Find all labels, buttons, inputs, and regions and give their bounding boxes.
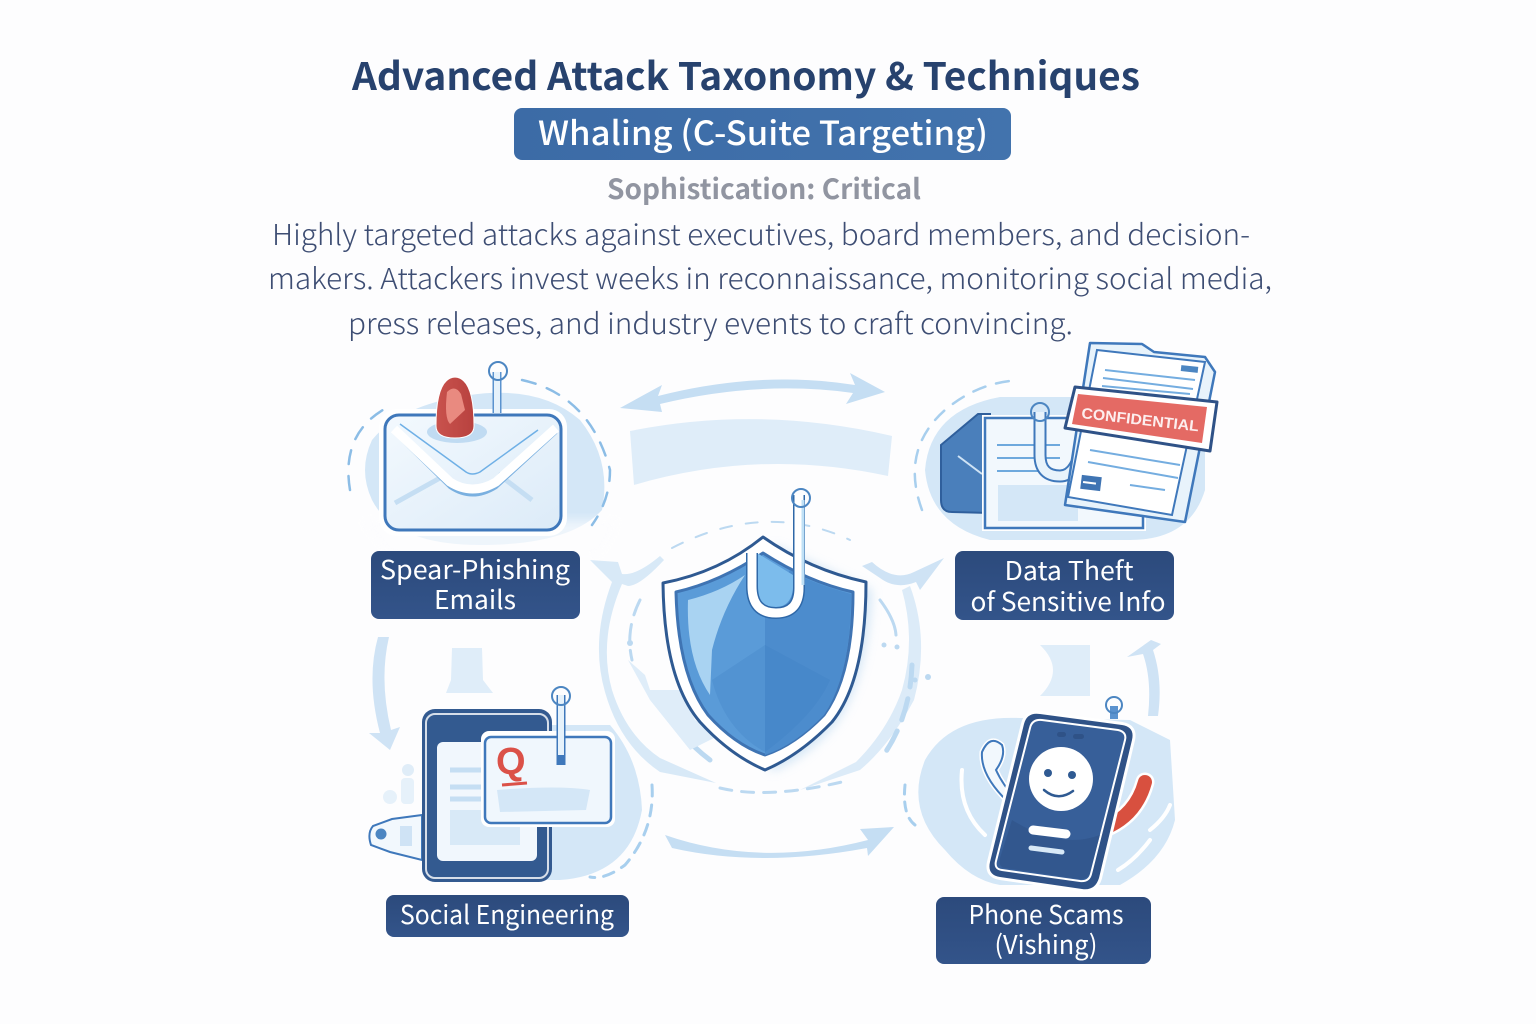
- label: social engineering: Social Engineering: [400, 895, 614, 932]
- dashed ring: [904, 785, 915, 825]
- confidential band: [1065, 387, 1217, 451]
- shield outer: [663, 537, 866, 770]
- label: data theft: of Sensitive Info: [970, 582, 1166, 619]
- sophistication level: Sophistication: Critical: [607, 168, 921, 208]
- top curved band: [630, 419, 892, 485]
- shield inner: [676, 553, 853, 755]
- icon background blob: [925, 397, 1205, 540]
- label: spear-phishing emails: Spear-Phishing: [380, 550, 570, 587]
- label: phone scams: (Vishing): [994, 925, 1098, 962]
- bottom arrow: [665, 827, 894, 858]
- icon: hook: [1110, 706, 1118, 719]
- panel: spear-phishing emails: [348, 362, 620, 555]
- hook: [752, 495, 799, 613]
- message card: [481, 731, 615, 827]
- right curved stub: [1040, 645, 1090, 696]
- panel: social engineering: [369, 687, 652, 882]
- subtitle pill: Whaling (C-Suite Targeting): [538, 107, 988, 155]
- top double-headed arrow: [620, 373, 885, 412]
- dashed ring: [590, 785, 652, 878]
- panel: data theft: CONFIDENTIAL: [1081, 405, 1200, 435]
- dark envelope: [941, 414, 990, 513]
- confidential document stack: [1065, 343, 1215, 522]
- label: phone scams: [936, 895, 1151, 964]
- description paragraph: makers. Attackers invest weeks in reconnaissance, monitoring social media,: [268, 256, 1272, 298]
- hook: [1040, 412, 1082, 476]
- left trapezoid arrow stub: [446, 648, 493, 693]
- envelope: [379, 409, 567, 536]
- icon: red handset: [1105, 782, 1145, 828]
- left down arrow: [369, 637, 400, 750]
- label: phone scams: Phone Scams: [968, 895, 1124, 932]
- tablet: [422, 709, 552, 882]
- description paragraph: Highly targeted attacks against executives, board members, and decision-: [272, 212, 1250, 254]
- phone body: [989, 714, 1133, 889]
- icon background blob: [918, 718, 1175, 885]
- description paragraph: press releases, and industry events to craft convincing.: [348, 301, 1073, 343]
- icon: blue handset: [982, 741, 1028, 822]
- label: spear-phishing emails: Emails: [434, 580, 516, 617]
- icon: hook: [556, 695, 566, 765]
- label: data theft: [955, 551, 1174, 620]
- panel: data theft: [915, 343, 1217, 540]
- right up arrow: [1127, 640, 1161, 716]
- phone bars: [1033, 830, 1066, 834]
- label: spear-phishing emails: [371, 550, 580, 619]
- flow arrows around the shield: [369, 373, 1161, 858]
- small side shapes: [402, 764, 414, 776]
- right Y arrow by shield: [862, 558, 944, 590]
- tag: [369, 815, 422, 860]
- icon background blob: [540, 725, 642, 880]
- icon: central shield with hook: [663, 489, 872, 772]
- icon: red pin: [436, 377, 474, 438]
- left Y arrow by shield: [590, 556, 716, 783]
- icon: hook: [492, 372, 502, 413]
- title: Advanced Attack Taxonomy & Techniques: [351, 46, 1140, 101]
- dashed ring: [915, 381, 1010, 510]
- description paragraph: [268, 212, 1272, 343]
- shield orbit dashes: [627, 522, 931, 792]
- icon: red Q glyph: Q: [496, 741, 526, 783]
- smiley face: [1029, 747, 1093, 811]
- icon background blob: [365, 393, 604, 545]
- paper document: [982, 415, 1146, 531]
- dashed ring: [348, 380, 610, 525]
- label: data theft: Data Theft: [1004, 551, 1134, 588]
- panel: phone scams: [904, 697, 1175, 889]
